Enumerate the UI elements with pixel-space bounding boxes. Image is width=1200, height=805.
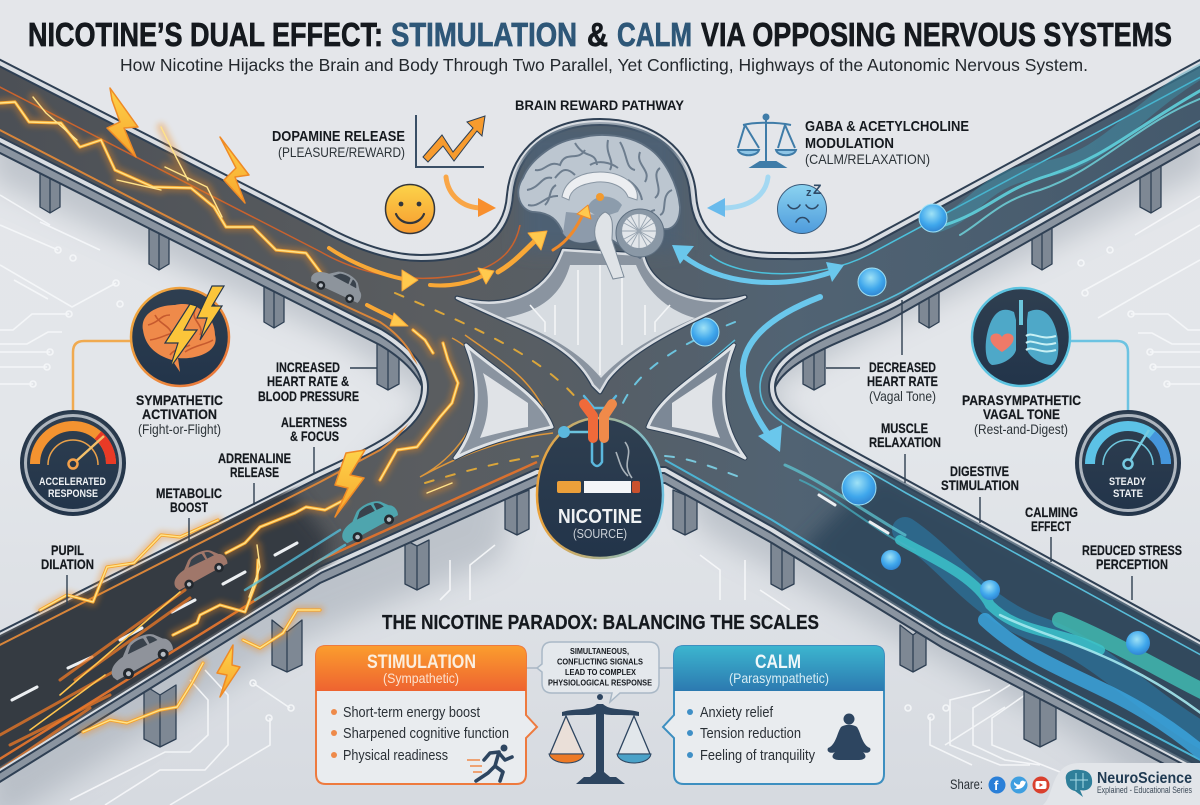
panel: calm: (Parasympathetic) (729, 670, 829, 686)
panel: calm: Anxiety relief (700, 705, 774, 721)
icon: rising chart (416, 115, 485, 167)
icon: sleepy face (778, 181, 826, 234)
heading: the nicotine paradox: THE NICOTINE PARADOX: BALANCING THE SCALES (382, 612, 819, 634)
panel: stimulation (316, 646, 537, 784)
icon: sleepy face: Z (813, 181, 822, 197)
label: reduced stress perception: PERCEPTION (1096, 556, 1168, 572)
title: & (587, 16, 608, 53)
icon: neuroscience brain (1066, 770, 1092, 797)
title: STIMULATION (391, 16, 577, 53)
orange pathway arrows (329, 231, 547, 326)
label: dopamine release: DOPAMINE RELEASE (272, 128, 405, 145)
nicotine source badge (537, 396, 663, 558)
label: sympathetic activation: SYMPATHETIC (136, 392, 223, 408)
panel: calm: CALM (755, 652, 801, 673)
icon: facebook: f (994, 778, 999, 793)
callout: conflicting signals (537, 642, 659, 702)
arrow: calm to brain (707, 177, 768, 217)
gauge: accelerated response (21, 411, 125, 515)
flow streams: parasympathetic (785, 65, 1200, 760)
callout: conflicting signals: PHYSIOLOGICAL RESPONSE (548, 678, 652, 688)
label: decreased heart rate: DECREASED (869, 359, 936, 375)
icon: smiley (386, 184, 434, 234)
speed streaks: lower-left road (0, 530, 345, 770)
share row: Share: (950, 776, 983, 792)
label: parasympathetic vagal tone (962, 392, 1081, 437)
label: alertness and focus (281, 414, 347, 444)
left interchange gap (455, 345, 552, 458)
label: dopamine release (272, 128, 405, 160)
icon: paradox scale (549, 694, 651, 784)
icon: youtube (1032, 776, 1050, 794)
title (28, 16, 1172, 53)
panel: stimulation: STIMULATION (367, 652, 476, 673)
right interchange gap (648, 345, 745, 458)
label: digestive stimulation (941, 463, 1019, 493)
leader lines (67, 300, 1132, 605)
icon: meditating figure (828, 714, 870, 760)
gauge: accelerated response: ACCELERATED (39, 476, 106, 488)
icon: sleepy face: z (806, 187, 812, 199)
heading: brain reward pathway: BRAIN REWARD PATHWAY (515, 98, 684, 113)
label: sympathetic activation (136, 392, 223, 437)
label: muscle relaxation (869, 420, 941, 450)
label: calming effect: EFFECT (1031, 518, 1071, 534)
panel: stimulation: (Sympathetic) (383, 670, 459, 686)
icon: balance scale (738, 114, 796, 167)
panel: calm: Feeling of tranquility (700, 748, 816, 764)
label: alertness and focus: ALERTNESS (281, 414, 347, 430)
label: sympathetic activation: ACTIVATION (142, 406, 217, 422)
pillars (40, 165, 1161, 747)
label: digestive stimulation: STIMULATION (941, 477, 1019, 493)
label: muscle relaxation: RELAXATION (869, 434, 941, 450)
label: calming effect: CALMING (1025, 504, 1078, 520)
nicotine source badge: (SOURCE) (573, 527, 627, 541)
label: dopamine release: (PLEASURE/REWARD) (278, 144, 405, 160)
icon: cigarette (557, 442, 640, 493)
label: sympathetic activation: (Fight-or-Flight) (138, 421, 221, 437)
label: alertness and focus: & FOCUS (290, 428, 339, 444)
label: gaba and acetylcholine: (CALM/RELAXATION) (805, 151, 930, 167)
label: increased heart rate: HEART RATE & (267, 373, 349, 389)
label: metabolic boost: BOOST (170, 499, 208, 515)
callout: conflicting signals: CONFLICTING SIGNALS (557, 656, 643, 666)
arrow: dopamine to brain (446, 177, 496, 217)
lightning: sympathetic road (0, 97, 458, 732)
label: increased heart rate (258, 359, 359, 404)
icon: sympathetic brain (131, 286, 229, 386)
lightning icons (107, 88, 365, 697)
title: CALM (617, 16, 692, 53)
icon: lungs and heart (972, 288, 1070, 386)
panel: calm: Tension reduction (700, 726, 801, 742)
label: pupil dilation: DILATION (41, 556, 94, 572)
icon: receptor (558, 396, 616, 466)
subtitle: How Nicotine Hijacks the Brain and Body Through Two Parallel, Yet Conflicting, Highways of the Autonomic Nervous System. (120, 55, 1088, 75)
panel: stimulation: Short-term energy boost (343, 705, 480, 721)
label: parasympathetic vagal tone: PARASYMPATHETIC (962, 392, 1081, 408)
callout: conflicting signals: LEAD TO COMPLEX (565, 667, 636, 677)
icon: twitter (1010, 776, 1028, 794)
label: gaba and acetylcholine (805, 118, 969, 167)
callout: conflicting signals: SIMULTANEOUS, (570, 646, 629, 656)
calm orbs (691, 204, 1150, 655)
brain (518, 135, 680, 279)
label: pupil dilation (41, 542, 94, 572)
label: increased heart rate: BLOOD PRESSURE (258, 388, 359, 404)
connector: sympathetic to gauge (73, 341, 130, 412)
label: adrenaline release (218, 450, 291, 480)
gauge: steady state: STEADY (1109, 476, 1147, 488)
cars (102, 259, 402, 685)
connector: parasympathetic to gauge (1071, 341, 1128, 412)
label: parasympathetic vagal tone: VAGAL TONE (983, 406, 1060, 422)
panel: stimulation: Physical readiness (343, 748, 448, 764)
label: adrenaline release: RELEASE (230, 464, 279, 480)
label: gaba and acetylcholine: GABA & ACETYLCHOLINE (805, 118, 969, 135)
icon: runner (467, 744, 512, 781)
label: pupil dilation: PUPIL (51, 542, 84, 558)
gauge: steady state (1076, 411, 1180, 515)
panel: calm (663, 646, 884, 784)
label: digestive stimulation: DIGESTIVE (950, 463, 1009, 479)
nicotine source badge: NICOTINE (558, 506, 642, 528)
label: increased heart rate: INCREASED (276, 359, 340, 375)
label: calming effect (1025, 504, 1078, 534)
title: NICOTINE’S DUAL EFFECT: (28, 16, 383, 53)
gauge: accelerated response: RESPONSE (48, 488, 98, 500)
gauge: steady state: STATE (1113, 488, 1143, 500)
footer badge: neuroscience (1043, 763, 1200, 805)
label: decreased heart rate: (Vagal Tone) (869, 388, 936, 404)
label: gaba and acetylcholine: MODULATION (805, 135, 894, 152)
label: parasympathetic vagal tone: (Rest-and-Digest) (974, 421, 1068, 437)
label: adrenaline release: ADRENALINE (218, 450, 291, 466)
arrow: into brain core (553, 205, 591, 250)
central gap with circuit board (457, 250, 745, 392)
label: decreased heart rate (867, 359, 938, 404)
connectors: cards to bubble (527, 667, 673, 669)
label: decreased heart rate: HEART RATE (867, 373, 938, 389)
lane markings (12, 293, 888, 700)
label: metabolic boost: METABOLIC (156, 485, 222, 501)
label: metabolic boost (156, 485, 222, 515)
circuit traces (0, 195, 1200, 805)
label: muscle relaxation: MUSCLE (881, 420, 928, 436)
share row (950, 776, 1050, 794)
panel: stimulation: Sharpened cognitive function (343, 726, 509, 742)
blue pathway arrows (672, 245, 844, 452)
label: reduced stress perception (1082, 542, 1182, 572)
